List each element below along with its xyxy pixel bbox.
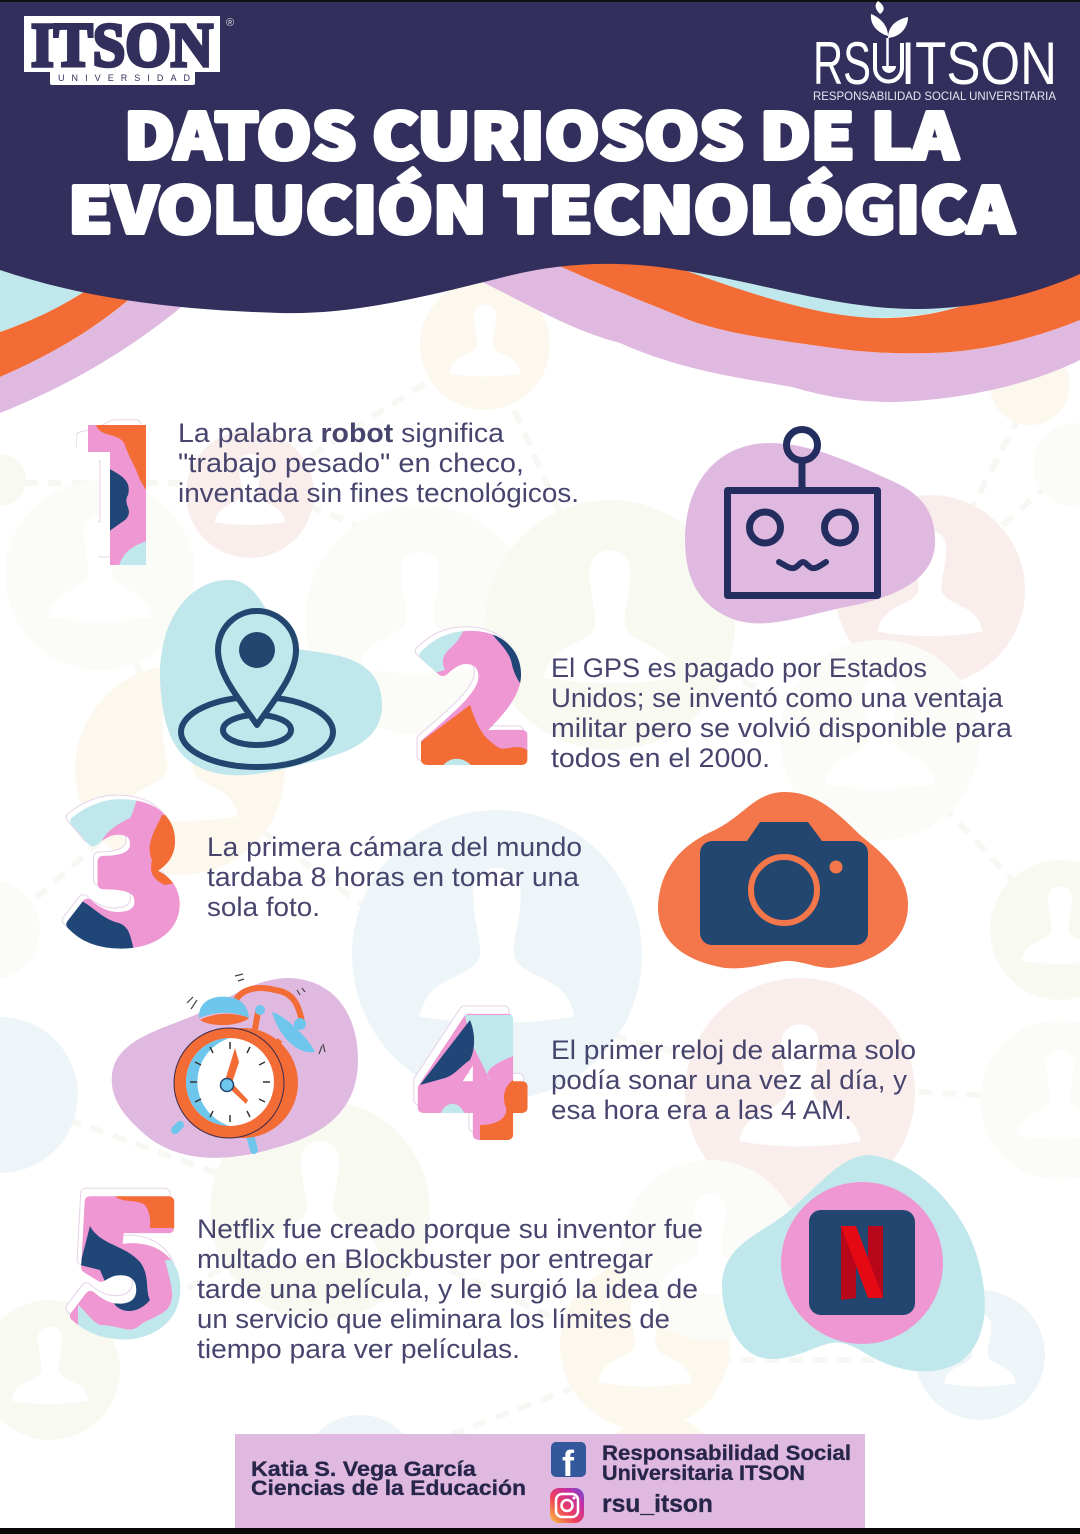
author credit [251, 1458, 526, 1500]
fact 5: text: un servicio que eliminara los límites de [197, 1304, 670, 1334]
ITSON logo: UNIVERSIDAD [58, 73, 190, 83]
fact 2: number [414, 626, 528, 765]
fact 3: text: sola foto. [207, 892, 320, 922]
icon: camera [658, 792, 908, 968]
title: EVOLUCIÓN TECNOLÓGICA [68, 161, 1016, 252]
fact 4: text: podía sonar una vez al día, y [551, 1065, 908, 1095]
fact 1: text: La palabra robot significa [178, 418, 505, 448]
fact 4: number: 4 [415, 942, 523, 1174]
title [68, 87, 1016, 252]
fact 5: text: Netflix fue creado porque su inventor fue [197, 1214, 703, 1244]
fact 4: text: El primer reloj de alarma solo [551, 1035, 916, 1065]
icon: Netflix [722, 1155, 985, 1371]
title: DATOS CURIOSOS DE LA [124, 87, 960, 178]
Facebook page name [602, 1442, 851, 1485]
RSU ITSON logo: RS [813, 30, 871, 97]
fact 1: text [178, 418, 579, 508]
author credit: Ciencias de la Educación [251, 1477, 526, 1500]
icon: Facebook: f [562, 1443, 575, 1484]
ITSON logo: ITSON [31, 12, 213, 80]
fact 5: number: 5 [66, 1116, 182, 1377]
fact 3: text [207, 832, 582, 922]
footer panel [235, 1434, 865, 1528]
fact 4: text [551, 1035, 916, 1125]
fact 5: text [197, 1214, 703, 1364]
fact 5: number: 5 [66, 1116, 182, 1377]
fact 4: number: 4 [415, 942, 523, 1174]
fact 3: number: 3 [63, 722, 181, 991]
icon: location pin [160, 580, 382, 775]
fact 2: text: militar pero se volvió disponible para [551, 713, 1013, 743]
fact 3: number [62, 794, 180, 949]
fact 2: text: Unidos; se inventó como una ventaja [551, 683, 1004, 713]
bottom bar [0, 1528, 1080, 1534]
Facebook page name: Universitaria ITSON [602, 1462, 805, 1485]
author credit: Katia S. Vega García [251, 1458, 476, 1481]
fact 1: text: "trabajo pesado" en checo, [178, 448, 524, 478]
fact 1: text: inventada sin fines tecnológicos. [178, 478, 579, 508]
ITSON logo: ® [226, 17, 234, 29]
fact 2: number: 2 [415, 561, 527, 805]
fact 3: text: La primera cámara del mundo [207, 832, 582, 862]
fact 2: text: El GPS es pagado por Estados [551, 653, 927, 683]
fact 4: number [413, 1005, 528, 1140]
fact 1: number [76, 419, 146, 565]
fact 5: number [66, 1188, 180, 1340]
fact 2: text [551, 653, 1013, 773]
icon: alarm clock [112, 974, 358, 1158]
fact 3: number: 3 [63, 722, 181, 991]
RSU ITSON logo: ITSON [901, 30, 1057, 97]
fact 5: text: tiempo para ver películas. [197, 1334, 520, 1364]
Facebook page name: Responsabilidad Social [602, 1442, 851, 1465]
icon: robot [685, 430, 935, 623]
icon: Facebook [551, 1442, 586, 1484]
fact 2: text: todos en el 2000. [551, 743, 770, 773]
header band [0, 0, 1080, 313]
fact 2: number: 2 [415, 561, 527, 805]
RSU ITSON logo: RESPONSABILIDAD SOCIAL UNIVERSITARIA [813, 89, 1056, 103]
fact 1: number: 1 [64, 350, 170, 603]
icon: Instagram [550, 1488, 584, 1523]
fact 4: text: esa hora era a las 4 AM. [551, 1095, 852, 1125]
decorative wave ribbons under header [0, 240, 1080, 413]
Instagram handle: rsu_itson [602, 1490, 713, 1518]
fact 1: number: 1 [64, 350, 170, 603]
fact 5: text: multado en Blockbuster por entregar [197, 1244, 653, 1274]
RSU ITSON logo [813, 1, 1057, 103]
fact 3: text: tardaba 8 horas en tomar una [207, 862, 580, 892]
fact 5: text: tarde una película, y le surgió la idea de [197, 1274, 698, 1304]
